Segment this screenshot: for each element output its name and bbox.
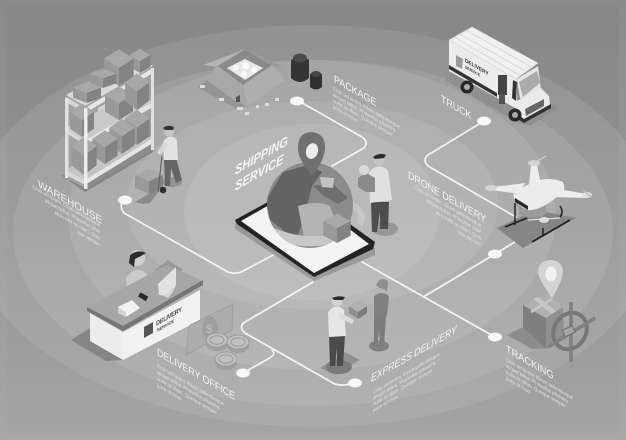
text: tracking bbox=[505, 356, 573, 420]
text: tracking: aliquet tellus. Phasellus pharetra bbox=[506, 363, 569, 405]
globe with pin and parcel bbox=[262, 132, 365, 248]
warehouse shelving bbox=[61, 49, 154, 192]
dark jars bbox=[291, 54, 322, 90]
counter sign text: SERVICE bbox=[157, 318, 174, 333]
tracking parcel with pin and crosshair bbox=[507, 260, 595, 362]
text: warehouse: que semper bbox=[77, 229, 100, 249]
truck logo text: SERVICE bbox=[465, 64, 480, 78]
heading: shipping service: SHIPPING bbox=[235, 132, 288, 178]
text: warehouse: aliquet tellus. Phasellus phar bbox=[45, 198, 100, 236]
text: warehouse: etra nulla ac diam. Quis bbox=[55, 210, 100, 242]
text: package bbox=[332, 85, 400, 149]
section headings: DELIVERY OFFICE bbox=[157, 347, 235, 403]
section headings: DRONE DELIVERY bbox=[408, 170, 486, 226]
drone bbox=[485, 156, 592, 248]
text: drone delivery: aliquet tellus. Phasellus phar bbox=[426, 198, 481, 236]
heading: shipping service: SERVICE bbox=[235, 151, 284, 194]
node dots bbox=[118, 96, 502, 388]
text: warehouse: Cras vel lorem. Etiam pellentesque bbox=[33, 184, 100, 229]
text: delivery office: nulla ac diam. Quisque semper bbox=[157, 376, 217, 417]
text: tracking: nulla ac diam. Quisque semper bbox=[506, 369, 566, 410]
text: express delivery bbox=[372, 351, 440, 415]
section headings: WAREHOUSE bbox=[38, 179, 102, 227]
delivery truck bbox=[445, 27, 558, 126]
text: package: aliquet tellus. Phasellus pharetra bbox=[333, 92, 396, 134]
text: package: Cras vel lorem. Etiam pellentesque bbox=[333, 86, 400, 131]
section headings: TRUCK bbox=[441, 94, 471, 123]
courier holding a parcel bbox=[358, 154, 398, 236]
central phone bbox=[235, 186, 375, 281]
text: drone delivery: Cras vel lorem. Etiam pellentesque bbox=[414, 184, 481, 229]
text: delivery office bbox=[156, 362, 224, 427]
text: delivery office: aliquet tellus. Phasellus pharetra bbox=[157, 369, 220, 412]
delivery office counter bbox=[71, 250, 203, 361]
text: tracking: justo at risus. bbox=[505, 375, 531, 396]
warehouse worker with trolley bbox=[135, 126, 182, 204]
text: express delivery: Cras vel lorem. Etiam pellentesque bbox=[373, 351, 440, 396]
text: express delivery: nulla ac diam. Quisque semper bbox=[373, 367, 433, 408]
section headings bbox=[38, 74, 554, 403]
connector lines bbox=[121, 100, 528, 385]
truck logo text: DELIVERY bbox=[465, 58, 489, 78]
section headings: EXPRESS DELIVERY bbox=[371, 324, 458, 385]
banknote and coins bbox=[186, 304, 249, 370]
text: express delivery: justo at risus. bbox=[372, 393, 398, 415]
location pin bbox=[298, 132, 325, 176]
text: package: justo at risus. bbox=[332, 103, 358, 125]
text: express delivery: aliquet tellus. Phasellus pharetra bbox=[373, 360, 436, 402]
text: delivery office: justo at risus. bbox=[156, 382, 182, 403]
text: drone delivery bbox=[414, 184, 481, 249]
counter logo bbox=[144, 322, 153, 338]
text: warehouse bbox=[33, 184, 100, 249]
section headings: PACKAGE bbox=[334, 74, 376, 110]
counter sign text: DELIVERY bbox=[156, 306, 183, 328]
text: drone delivery: que semper bbox=[458, 229, 481, 249]
banknote and coins: $ bbox=[206, 322, 213, 336]
express delivery couple bbox=[320, 279, 389, 375]
section headings: TRACKING bbox=[506, 344, 554, 383]
text: package: nulla ac diam. Quisque semper bbox=[333, 98, 393, 139]
text: drone delivery: etra nulla ac diam. Quis bbox=[436, 210, 481, 242]
open cardboard box with filler bbox=[198, 49, 285, 115]
text: tracking: Cras vel lorem. Etiam pellentesque bbox=[506, 357, 573, 402]
text: delivery office: Cras vel lorem. Etiam pellentesque bbox=[157, 363, 224, 408]
